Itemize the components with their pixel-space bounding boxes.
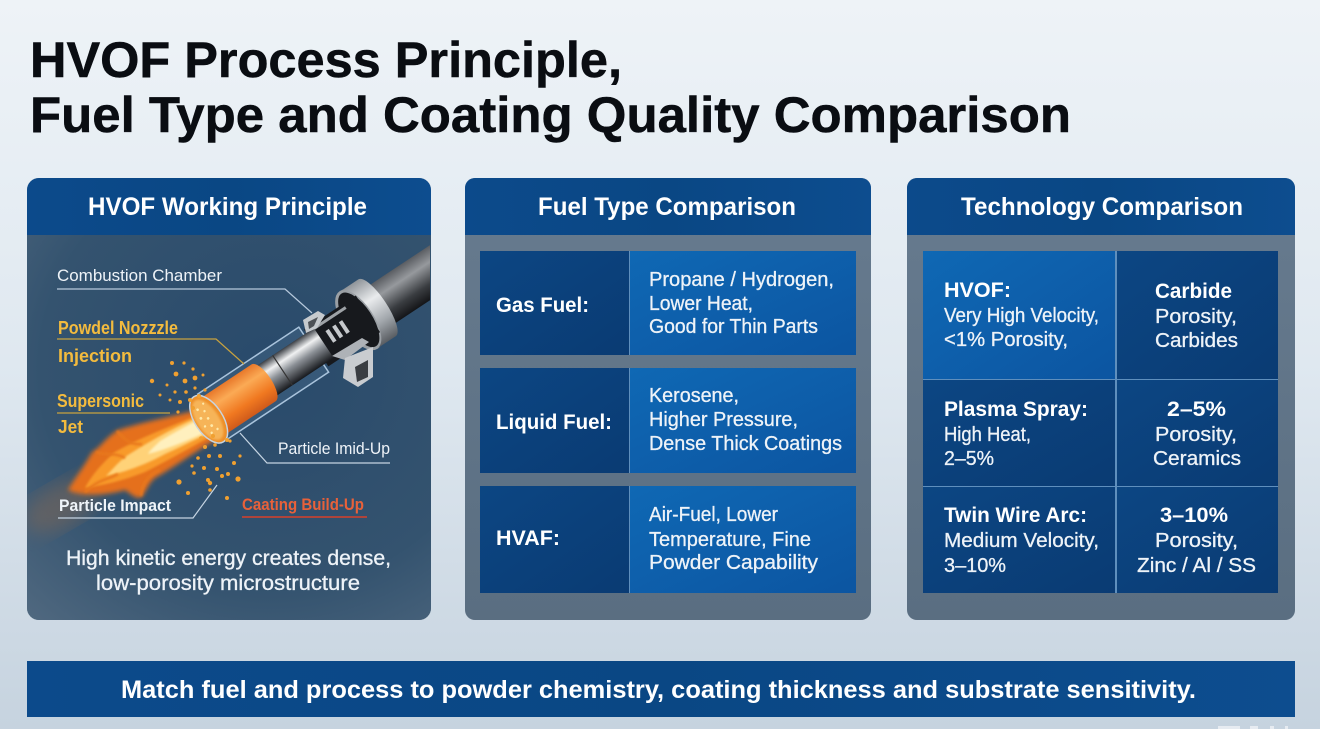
row: twin wire arc: Porosity, bbox=[1155, 530, 1238, 552]
row: plasma spray bbox=[923, 380, 1278, 486]
row: HVAF: Powder Capability bbox=[649, 552, 818, 574]
illustration: leader lines bbox=[57, 289, 390, 518]
row: twin wire arc: 3–10% bbox=[1160, 504, 1228, 527]
title: HVOF Process Principle, bbox=[30, 32, 622, 88]
footer banner bbox=[27, 661, 1295, 717]
heading: Fuel Type Comparison: Fuel Type Comparison bbox=[538, 193, 796, 221]
hot orange tube bbox=[204, 364, 278, 433]
heading: Technology Comparison: Technology Comparison bbox=[961, 193, 1243, 221]
row: gas fuel bbox=[480, 251, 856, 355]
illustration: particles bbox=[150, 361, 242, 500]
caption: High kinetic energy creates dense, bbox=[66, 547, 391, 570]
row: plasma spray: Plasma Spray: bbox=[944, 398, 1088, 421]
row: twin wire arc: Zinc / Al / SS bbox=[1137, 555, 1256, 577]
row: plasma spray: Porosity, bbox=[1155, 424, 1237, 446]
row: liquid fuel: Liquid Fuel: bbox=[496, 411, 612, 434]
label: Powdel Nozzle Injection: Powdel Nozzzle bbox=[58, 318, 178, 338]
collar opening bbox=[335, 290, 382, 350]
row: plasma spray: 2–5% bbox=[1167, 398, 1226, 421]
heading: Technology Comparison bbox=[907, 178, 1295, 235]
label: Particle Imid-Up: Particle Imid-Up bbox=[278, 439, 390, 458]
label: Powdel Nozzle Injection bbox=[58, 318, 178, 366]
row: gas fuel: Propane / Hydrogen, bbox=[649, 269, 834, 291]
row: HVAF: Temperature, Fine bbox=[649, 529, 811, 551]
row: HVAF: HVAF: bbox=[496, 527, 560, 550]
row: liquid fuel: Dense Thick Coatings bbox=[649, 433, 842, 455]
row: twin wire arc: 3–10% bbox=[944, 555, 1006, 577]
label: Coating Build-Up: Caating Build-Up bbox=[242, 495, 364, 514]
row: twin wire arc: Twin Wire Arc: bbox=[944, 504, 1087, 527]
label: Powdel Nozzle Injection: Injection bbox=[58, 346, 132, 366]
footer banner: Match fuel and process to powder chemistry, coating thickness and substrate sensitivity. bbox=[121, 676, 1196, 704]
row: HVOF: <1% Porosity, bbox=[944, 329, 1068, 351]
tip opening bbox=[189, 394, 228, 444]
title: Fuel Type and Coating Quality Comparison bbox=[30, 87, 1071, 143]
heading: HVOF Working Principle bbox=[27, 178, 431, 235]
row: gas fuel: Lower Heat, bbox=[649, 293, 753, 315]
illustration: flame bbox=[27, 408, 230, 538]
row: gas fuel: Gas Fuel: bbox=[496, 294, 589, 317]
row: plasma spray: Ceramics bbox=[1153, 448, 1241, 470]
title bbox=[30, 32, 1071, 143]
caption: low-porosity microstructure bbox=[96, 572, 360, 595]
heading: HVOF Working Principle: HVOF Working Principle bbox=[88, 193, 367, 221]
row: liquid fuel bbox=[480, 368, 856, 473]
illustration background bbox=[27, 235, 431, 620]
row: HVOF: Carbides bbox=[1155, 330, 1238, 352]
smoke haze bbox=[27, 471, 104, 538]
label: Supersonic Jet bbox=[57, 391, 144, 437]
main pipe bbox=[370, 245, 430, 323]
panel: HVOF working principle bbox=[27, 178, 431, 620]
label: Particle Impact: Particle Impact bbox=[59, 496, 171, 515]
row: HVOF: Very High Velocity, bbox=[944, 305, 1099, 327]
row: HVOF bbox=[923, 251, 1278, 379]
dark inner barrel bbox=[304, 295, 380, 366]
row: HVOF: HVOF: bbox=[944, 279, 1011, 302]
glass sleeve bbox=[197, 327, 329, 440]
row: HVAF: Air-Fuel, Lower bbox=[649, 504, 778, 526]
row: gas fuel: Good for Thin Parts bbox=[649, 316, 818, 338]
row: twin wire arc: Medium Velocity, bbox=[944, 530, 1099, 552]
bracket lower bbox=[332, 338, 373, 387]
illustration: nozzle bbox=[189, 245, 430, 444]
label: Combustion Chamber: Combustion Chamber bbox=[57, 266, 222, 285]
row: plasma spray: 2–5% bbox=[944, 448, 994, 470]
row: plasma spray: High Heat, bbox=[944, 424, 1031, 446]
caption bbox=[66, 547, 391, 595]
row: HVAF bbox=[480, 486, 856, 593]
label: Supersonic Jet: Supersonic bbox=[57, 391, 144, 411]
row: liquid fuel: Higher Pressure, bbox=[649, 409, 798, 431]
panel: fuel type comparison bbox=[465, 178, 871, 620]
label: Supersonic Jet: Jet bbox=[58, 417, 83, 437]
comparison table background bbox=[923, 251, 1278, 593]
row: liquid fuel: Kerosene, bbox=[649, 385, 739, 407]
collar band bbox=[342, 278, 398, 348]
panel: technology comparison bbox=[907, 178, 1295, 620]
steel tube bbox=[254, 328, 334, 398]
row: HVOF: Porosity, bbox=[1155, 306, 1237, 328]
heading: Fuel Type Comparison bbox=[465, 178, 871, 235]
row: HVOF: Carbide bbox=[1155, 280, 1232, 303]
row: twin wire arc bbox=[923, 487, 1278, 593]
bracket upper bbox=[303, 311, 325, 333]
